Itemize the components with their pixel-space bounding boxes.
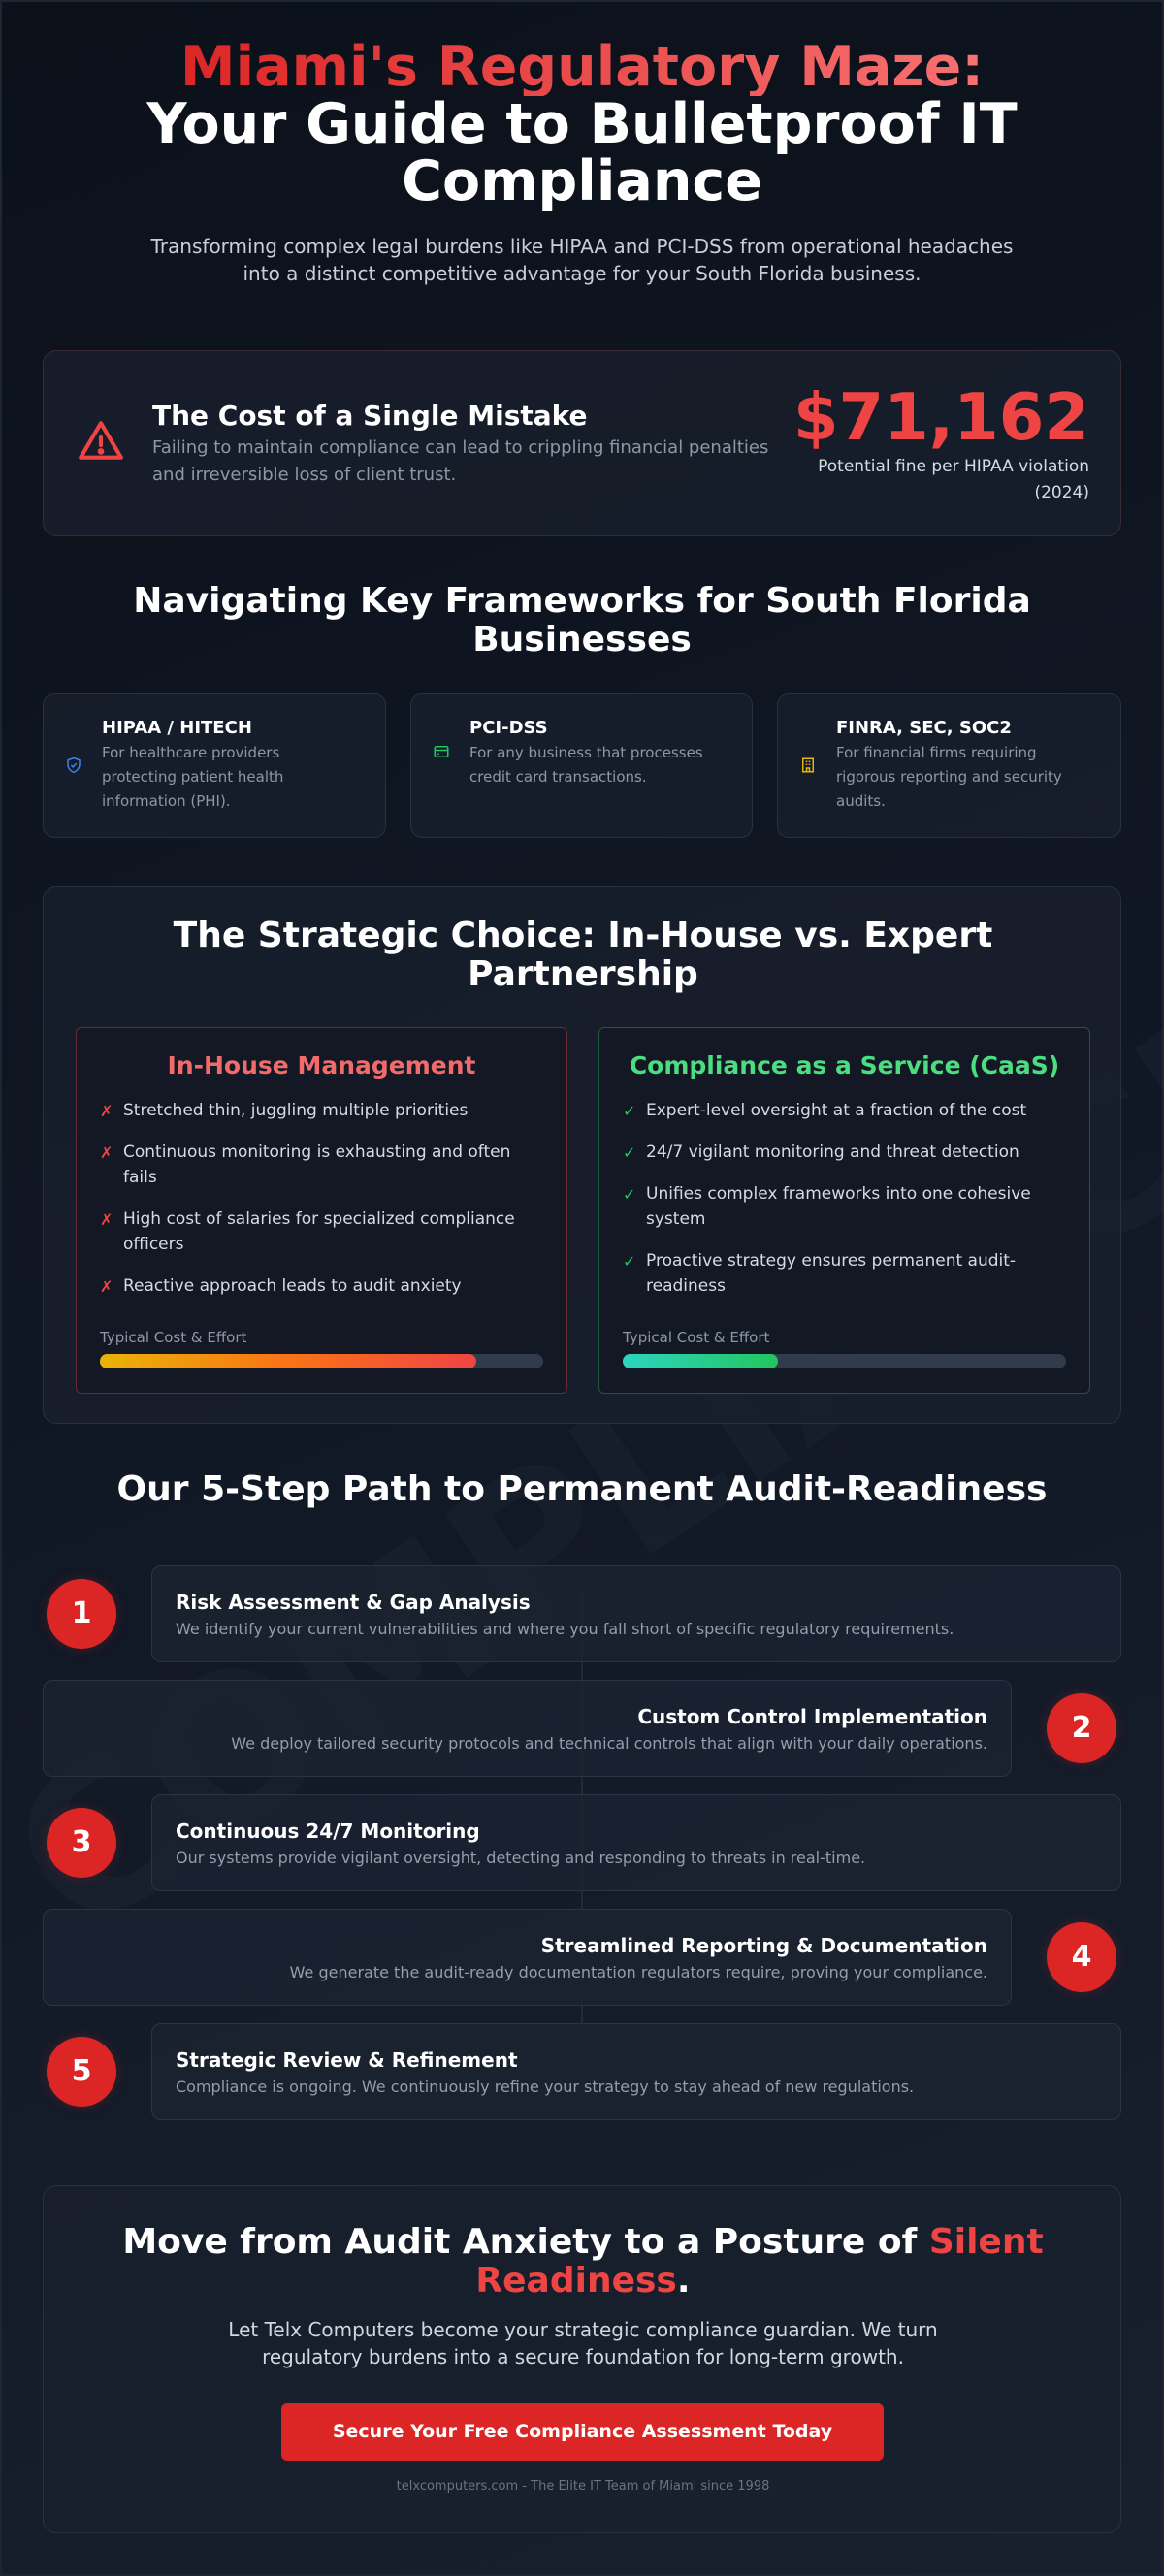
step 3: Our systems provide vigilant oversight, detecting and responding to threats in real-time. [176, 1849, 865, 1867]
panel: CTA [43, 2185, 1121, 2533]
sub-panel: CaaS: Proactive strategy ensures permanent audit-readiness [646, 1251, 1016, 1296]
stat: fine [793, 379, 1089, 502]
sub-panel: CaaS: 24/7 vigilant monitoring and threat detection [646, 1143, 1019, 1162]
step 4: 4 [1072, 1940, 1091, 1974]
card: HIPAA: For healthcare providers protecting patient health information (PHI). [102, 744, 283, 810]
step 1: 1 [72, 1596, 91, 1630]
step 2 [43, 1680, 1121, 1777]
heading: The Strategic Choice: In-House vs. Expert Partnership [174, 916, 992, 994]
step 5 [42, 2023, 1121, 2120]
step 3: 3 [72, 1825, 91, 1859]
card: PCI [410, 693, 753, 838]
step 1 [42, 1565, 1121, 1662]
subtitle: Transforming complex legal burdens like HIPAA and PCI-DSS from operational headaches into a distinct competitive advantage for your South Florida business. [151, 235, 1013, 285]
step 4 [43, 1909, 1121, 2006]
panel: cost of a mistake [43, 350, 1121, 536]
button: Secure Your Free Compliance Assessment Today [333, 2421, 832, 2442]
card: FINRA: For financial firms requiring rigorous reporting and security audits. [836, 744, 1062, 810]
sub-panel: in-house: In-House Management [168, 1051, 475, 1079]
sub-panel: in-house: Stretched thin, juggling multiple priorities [123, 1101, 468, 1120]
sub-panel: CaaS: Unifies complex frameworks into one cohesive system [646, 1184, 1031, 1229]
CTA text: Let Telx Computers become your strategic compliance guardian. We turn regulatory burdens into a secure foundation for long-term growth. [228, 2318, 938, 2368]
stat: fine: Potential fine per HIPAA violation (2024) [818, 457, 1089, 502]
bar: in-house cost [100, 1354, 543, 1368]
step 3: Continuous 24/7 Monitoring [176, 1819, 480, 1843]
sub-panel: in-house: Continuous monitoring is exhausting and often fails [123, 1143, 510, 1187]
heading: frameworks: Navigating Key Frameworks for South Florida Businesses [133, 581, 1031, 660]
title: Miami's Regulatory Maze: [180, 35, 984, 99]
icon: warning [79, 421, 123, 460]
description: Failing to maintain compliance can lead to crippling financial penalties and irreversible loss of client trust. [152, 437, 768, 485]
step 5: Strategic Review & Refinement [176, 2048, 518, 2072]
title: Compliance [402, 149, 762, 213]
sub-panel: in-house: Typical Cost & Effort [100, 1329, 246, 1346]
card: FINRA: FINRA, SEC, SOC2 [836, 718, 1012, 738]
sub-panel: CaaS: ✓ [623, 1143, 635, 1162]
step 1: Risk Assessment & Gap Analysis [176, 1591, 531, 1614]
title: Your Guide to Bulletproof IT [146, 92, 1018, 156]
card: HIPAA: HIPAA / HITECH [102, 718, 252, 738]
step 4: Streamlined Reporting & Documentation [541, 1934, 987, 1957]
step 5: 5 [72, 2054, 91, 2088]
button [281, 2403, 884, 2461]
sub-panel: CaaS: ✓ [623, 1185, 635, 1204]
bar: CaaS cost [623, 1354, 1066, 1368]
sub-panel: CaaS: Expert-level oversight at a fraction of the cost [646, 1101, 1026, 1120]
sub-panel: in-house: ✗ [100, 1277, 113, 1296]
title [146, 35, 1018, 213]
sub-panel: in-house: ✗ [100, 1102, 113, 1120]
step 3 [42, 1794, 1121, 1891]
footer: telxcomputers.com - The Elite IT Team of Miami since 1998 [397, 2479, 769, 2494]
step 2: Custom Control Implementation [637, 1705, 987, 1728]
sub-panel: in-house: ✗ [100, 1210, 113, 1229]
card: PCI: For any business that processes credit card transactions. [469, 744, 703, 786]
step 2: 2 [1072, 1711, 1091, 1745]
step 1: We identify your current vulnerabilities and where you fall short of specific regulatory requirements. [176, 1620, 954, 1638]
CTA heading: Move from Audit Anxiety to a Posture of Silent Readiness. [122, 2222, 1044, 2301]
step 4: We generate the audit-ready documentation regulators require, proving your compliance. [290, 1963, 987, 1981]
sub-panel: CaaS: Typical Cost & Effort [623, 1329, 769, 1346]
card: FINRA [777, 693, 1121, 838]
step 2: We deploy tailored security protocols and technical controls that align with your daily operations. [231, 1734, 987, 1753]
panel: strategic choice [43, 886, 1121, 1424]
step 5: Compliance is ongoing. We continuously refine your strategy to stay ahead of new regulations. [176, 2077, 914, 2096]
heading: The Cost of a Single Mistake [152, 400, 588, 432]
stat: fine: $71,162 [793, 379, 1089, 455]
sub-panel: in-house [76, 1027, 567, 1394]
sub-panel: in-house: High cost of salaries for specialized compliance officers [123, 1209, 515, 1254]
heading: steps: Our 5-Step Path to Permanent Audit-Readiness [117, 1469, 1047, 1509]
card: PCI: PCI-DSS [469, 718, 548, 738]
sub-panel: in-house: ✗ [100, 1143, 113, 1162]
sub-panel: CaaS: Compliance as a Service (CaaS) [630, 1051, 1059, 1079]
card: HIPAA [43, 693, 386, 838]
sub-panel: in-house: Reactive approach leads to audit anxiety [123, 1276, 462, 1296]
sub-panel: CaaS: ✓ [623, 1102, 635, 1120]
timeline line [581, 1587, 583, 2076]
sub-panel: CaaS: ✓ [623, 1252, 635, 1271]
sub-panel: CaaS [598, 1027, 1090, 1394]
